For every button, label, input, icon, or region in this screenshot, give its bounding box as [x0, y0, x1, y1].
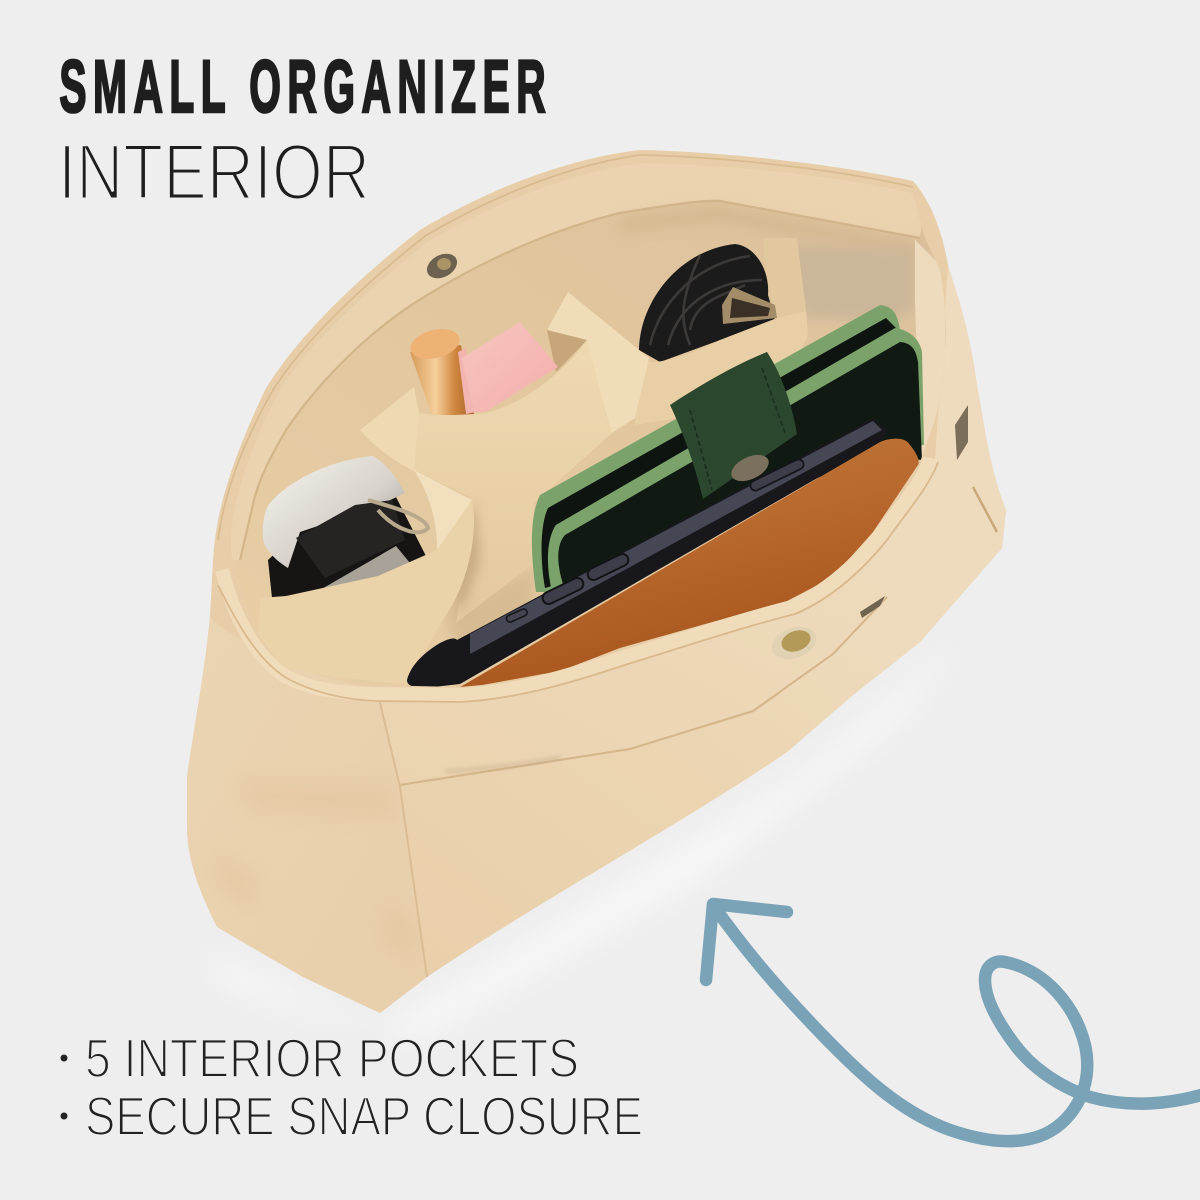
upper front panel — [377, 535, 887, 783]
tan leather item — [455, 439, 919, 690]
shadow under seam — [626, 209, 888, 244]
pocket wing — [770, 238, 806, 312]
right outer wall — [780, 265, 1006, 752]
interior back wall — [350, 202, 946, 572]
pocket gap — [860, 596, 885, 618]
lining band — [200, 150, 930, 560]
cable pocket — [635, 238, 808, 425]
pocket throat shadow — [547, 330, 587, 372]
pocket front — [635, 311, 808, 425]
usb cable — [639, 244, 777, 362]
arrow pointing to the organizer — [706, 904, 1200, 1141]
shaded back right corner — [798, 245, 915, 320]
right wing — [547, 292, 649, 433]
middle pocket with lipstick and compact — [360, 292, 649, 623]
left pocket inner lip — [414, 470, 472, 552]
soft floor glow under the bag — [205, 640, 960, 1040]
front snap — [767, 621, 821, 665]
pink compact — [462, 322, 558, 412]
rear snap — [423, 249, 461, 283]
heading: small organizer: SMALL ORGANIZER — [59, 45, 546, 128]
left wing — [360, 387, 419, 472]
pocket seam — [400, 597, 887, 785]
side crease — [973, 487, 997, 532]
rim stitching — [218, 462, 938, 702]
left side panel — [187, 617, 427, 1013]
wallet strap — [670, 352, 797, 499]
lower front panel — [400, 599, 920, 977]
organizer photo — [187, 140, 1006, 1040]
wallet — [532, 305, 924, 592]
bullet one — [60, 1054, 68, 1062]
side snap shadow — [955, 405, 968, 460]
lipstick — [410, 329, 475, 415]
feature: secure snap closure: SECURE SNAP CLOSURE — [85, 1085, 643, 1147]
feature list — [60, 1027, 643, 1147]
fold line — [377, 690, 427, 977]
bag silhouette — [187, 150, 1006, 1013]
lining seam — [240, 201, 920, 560]
wallet snap — [731, 454, 769, 482]
shadow cast by left pocket — [452, 500, 480, 610]
front rim band — [222, 458, 930, 695]
interior clipped to the opening — [239, 200, 946, 687]
title — [58, 45, 546, 216]
bullet two — [60, 1112, 68, 1120]
key fob — [263, 456, 428, 598]
shadow below middle pocket — [448, 576, 533, 640]
feature: 5 interior pockets: 5 INTERIOR POCKETS — [85, 1027, 579, 1089]
pocket front — [414, 340, 612, 623]
pocket seam shadow — [445, 757, 560, 772]
phone — [407, 418, 888, 688]
right inner wall — [915, 240, 945, 462]
top rim stitching — [218, 155, 913, 540]
fabric shading on side panel — [215, 780, 420, 960]
front left pocket — [272, 504, 474, 624]
subheading: interior: INTERIOR — [58, 127, 370, 216]
